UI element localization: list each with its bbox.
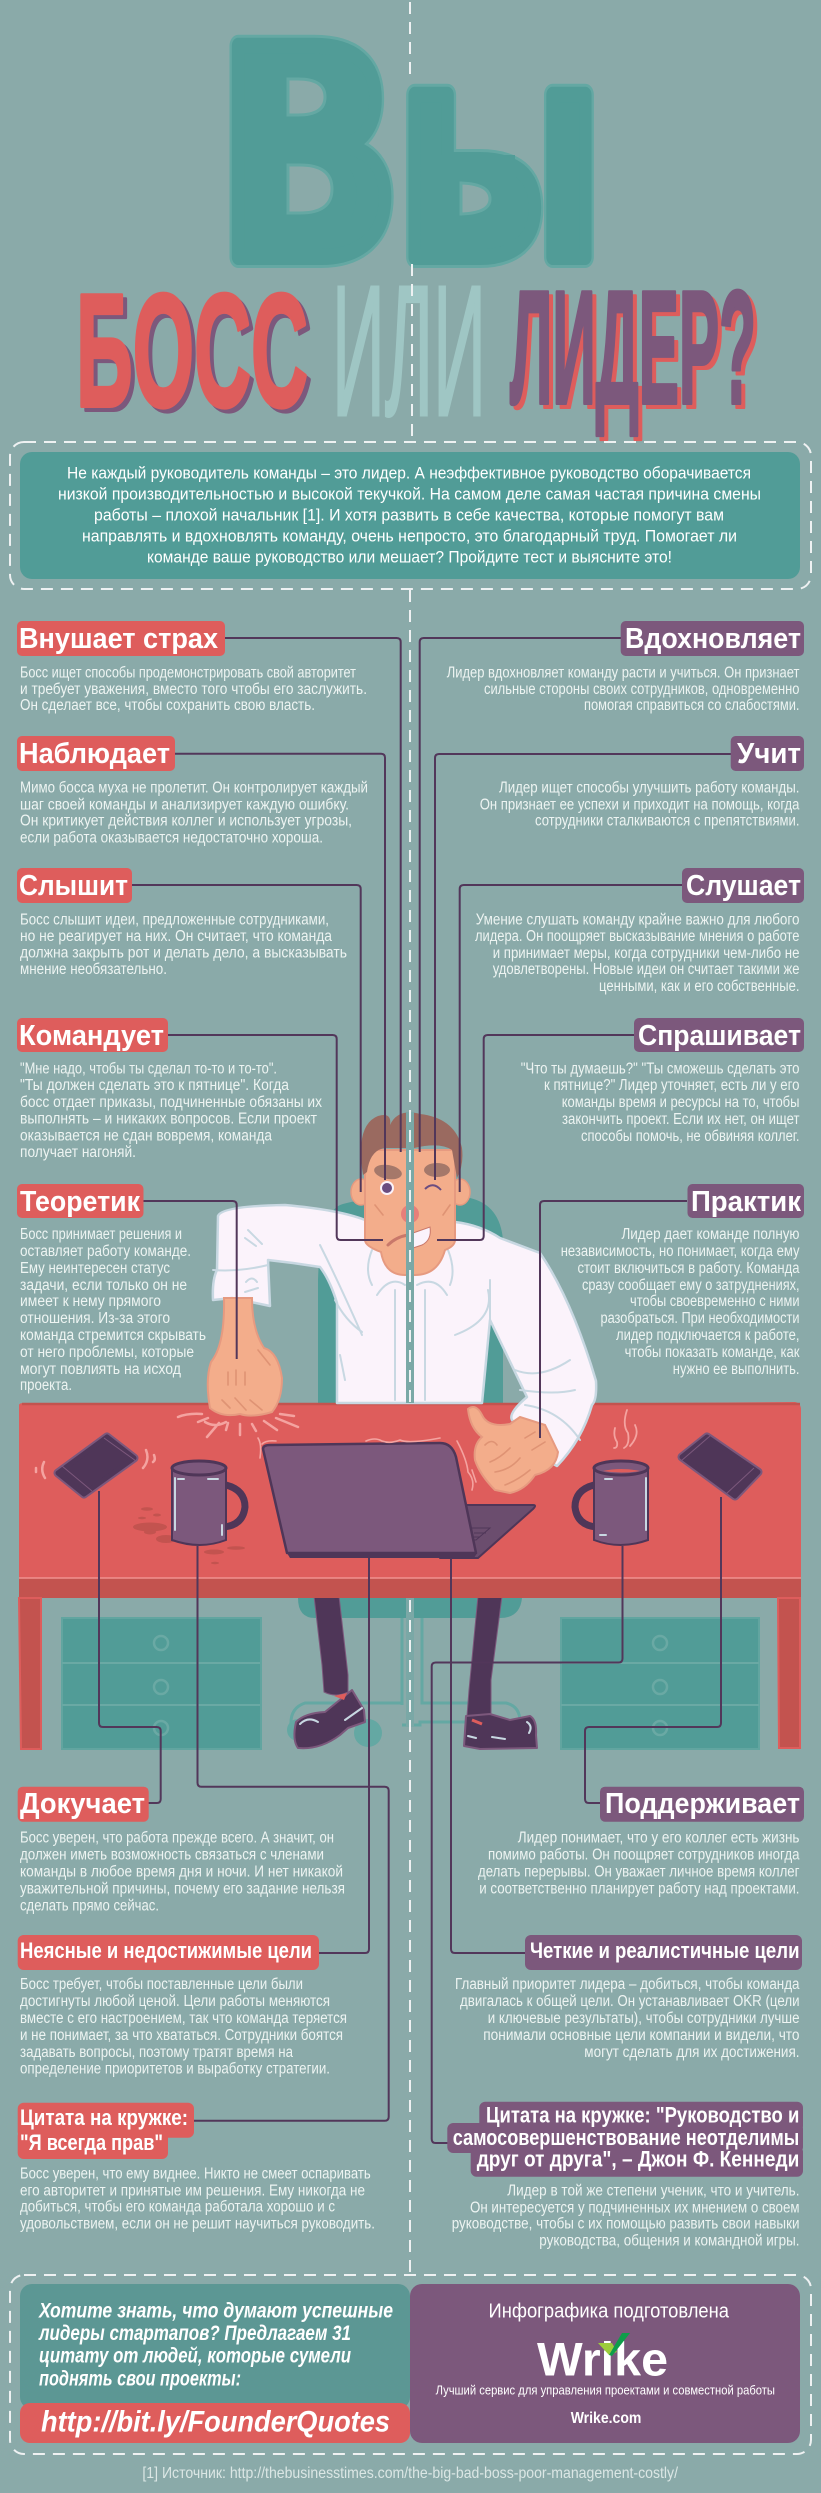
illustration: chair seat and base bbox=[287, 1598, 522, 1747]
boss: Внушает страх: Внушает страх bbox=[19, 623, 218, 655]
connector: Командует bbox=[168, 1035, 383, 1240]
boss: Неясные и недостижимые цели: задавать вопросы, поэтому тратят время на bbox=[20, 2044, 293, 2061]
boss: Командует: получает нагоняй. bbox=[20, 1144, 136, 1161]
boss: Слышит: но не реагирует на них. Он считает, что команда bbox=[20, 928, 332, 945]
boss: Наблюдает: Он критикует действия коллег и использует угрозы, bbox=[20, 813, 352, 830]
boss: Неясные и недостижимые цели: достигнуты любой ценой. Цели работы меняются bbox=[20, 1993, 330, 2010]
boss: Наблюдает: Наблюдает bbox=[19, 738, 170, 770]
connector: Неясные цели bbox=[319, 1558, 369, 1953]
illustration: right drawers bbox=[561, 1618, 759, 1749]
panel: quotes invitation: поднять свои проекты: bbox=[39, 2368, 241, 2391]
illustration: laptop bbox=[263, 1443, 535, 1558]
text: БОСС bbox=[76, 261, 308, 441]
text: ИЛИ bbox=[332, 248, 486, 455]
boss: Наблюдает: Мимо босса муха не пролетит. Он контролирует каждый bbox=[20, 779, 368, 796]
boss: Теоретик: Теоретик bbox=[20, 1186, 140, 1218]
boss: Неясные и недостижимые цели: Босс требует, чтобы поставленные цели были bbox=[20, 1976, 303, 1993]
panel: quotes invitation: лидеры стартапов? Предлагаем 31 bbox=[38, 2322, 351, 2345]
boss: Внушает страх: Босс ищет способы продемонстрировать свой авторитет bbox=[20, 664, 356, 682]
connector: Четкие цели bbox=[451, 1558, 525, 1953]
boss: Командует: "Мне надо, чтобы ты сделал то-то и то-то". bbox=[20, 1060, 277, 1078]
panel: Wrike credit: Лучший сервис для управления проектами и совместной работы bbox=[436, 2382, 775, 2397]
boss: Внушает страх: и требует уважения, вместо того чтобы его заслужить. bbox=[20, 681, 367, 698]
boss: Неясные и недостижимые цели: Неясные и недостижимые цели bbox=[20, 1938, 312, 1963]
boss: Командует: оказывается не сдан вовремя, команда bbox=[20, 1127, 272, 1144]
connector: Поддерживает bbox=[585, 1497, 721, 1803]
connector: Практик bbox=[540, 1201, 687, 1438]
boss: Цитата на кружке: Цитата на кружке: bbox=[20, 2105, 188, 2130]
boss: Теоретик: могут повлиять на исход bbox=[20, 1361, 181, 1378]
title: Вы bbox=[222, 0, 602, 323]
boss: Теоретик bbox=[17, 1184, 206, 1394]
boss: Докучает: должен иметь возможность связаться с членами bbox=[20, 1846, 324, 1863]
boss: Теоретик: задачи, если только он не bbox=[20, 1277, 187, 1294]
panel: introduction: работы – плохой начальник [1]. И хотя развить в себе качества, которые помогут вам bbox=[94, 506, 724, 524]
leader: Вдохновляет: Вдохновляет bbox=[625, 623, 801, 655]
boss: Теоретик: команда стремится скрывать bbox=[20, 1327, 206, 1344]
boss: Наблюдает: шаг своей команды и анализирует каждую ошибку. bbox=[20, 796, 349, 813]
leader: Спрашивает bbox=[521, 1018, 804, 1145]
text: БОСС bbox=[80, 265, 312, 445]
boss: Внушает страх: Он сделает все, чтобы сохранить свою власть. bbox=[20, 697, 315, 714]
illustration: chair back bbox=[318, 1198, 503, 1403]
leader: Слушает: Слушает bbox=[686, 870, 801, 902]
panel: quotes invitation: цитату от людей, которые сумели bbox=[39, 2345, 351, 2368]
boss: Командует: "Ты должен сделать это к пятнице". Когда bbox=[20, 1077, 289, 1094]
illustration: fist on the desk bbox=[208, 1298, 282, 1416]
panel: Wrike credit bbox=[410, 2284, 800, 2443]
boss: Слышит: мнение необязательно. bbox=[20, 961, 167, 978]
connector: Цитата босса bbox=[194, 1546, 389, 2121]
connector: Наблюдает bbox=[175, 754, 385, 1180]
boss: Теоретик: проекта. bbox=[20, 1377, 72, 1394]
leader: Четкие и реалистичные цели bbox=[455, 1935, 802, 2061]
boss: Неясные и недостижимые цели: определение приоритетов и выработку стратегии. bbox=[20, 2060, 330, 2078]
boss: Цитата на кружке: добиться, чтобы его команда работала хорошо и с bbox=[20, 2199, 335, 2216]
illustration: laptop vibration lines bbox=[258, 1438, 476, 1490]
boss: Теоретик: имеет к нему прямого bbox=[20, 1293, 161, 1310]
dashed center divider bbox=[410, 2, 412, 2276]
boss: Слышит: Слышит bbox=[19, 870, 128, 902]
leader: Учит: Учит bbox=[737, 738, 801, 770]
connector: Слушает bbox=[460, 885, 682, 1192]
leader: Вдохновляет bbox=[447, 621, 804, 714]
leader: Цитата на кружке bbox=[447, 2102, 803, 2249]
illustration: left drawers bbox=[62, 1618, 261, 1749]
illustration: left phone bbox=[36, 1437, 155, 1494]
illustration: desk bbox=[19, 1402, 801, 1749]
boss: Теоретик: Босс принимает решения и bbox=[20, 1226, 182, 1243]
panel: link: http://bit.ly/FounderQuotes bbox=[41, 2406, 390, 2439]
boss: Наблюдает bbox=[17, 736, 368, 846]
panel: introduction: Не каждый руководитель команды – это лидер. А неэффективное руководство оборачивается bbox=[67, 464, 751, 482]
leader: Спрашивает: Спрашивает bbox=[638, 1020, 801, 1052]
leader: Практик bbox=[561, 1184, 804, 1378]
boss: Слышит bbox=[17, 868, 347, 978]
boss: Теоретик: Ему неинтересен статус bbox=[20, 1260, 170, 1277]
boss: Докучает: уважительной причины, почему его задание нельзя bbox=[20, 1880, 345, 1897]
connector: Теоретик bbox=[143, 1201, 237, 1359]
connector: Слышит bbox=[132, 885, 361, 1192]
logo: Wrike: Wrike bbox=[537, 2333, 668, 2386]
boss: Неясные и недостижимые цели: и не понимает, за что хвататься. Сотрудники боятся bbox=[20, 2027, 343, 2044]
panel: introduction bbox=[10, 442, 811, 589]
connector: Внушает страх bbox=[225, 638, 401, 1152]
leader: Слушает bbox=[475, 868, 804, 995]
boss: Теоретик: оставляет работу команде. bbox=[20, 1243, 191, 1260]
leader: Практик: Практик bbox=[691, 1186, 801, 1218]
illustration: legs and shoes bbox=[294, 1596, 537, 1749]
boss: Слышит: должна закрыть рот и делать дело, а высказывать bbox=[20, 944, 347, 962]
panel: introduction: низкой производительностью и высокой текучкой. На самом деле самая частая причина смены bbox=[58, 486, 761, 504]
illustration: shirt torso and arms bbox=[213, 1205, 596, 1466]
boss: Внушает страх bbox=[17, 621, 367, 714]
connector: Спрашивает bbox=[437, 1035, 634, 1240]
illustration: left mug bbox=[172, 1461, 245, 1545]
boss: Цитата на кружке: его авторитет и принятые им решения. Ему никогда не bbox=[20, 2182, 365, 2199]
boss: Докучает bbox=[18, 1787, 345, 1914]
boss: Командует: выполнять – и никаких вопросов. Если проект bbox=[20, 1111, 317, 1128]
panel: footer frame bbox=[10, 2275, 811, 2454]
boss: Командует bbox=[17, 1018, 322, 1161]
title: БОСС bbox=[76, 261, 312, 445]
boss: Теоретик: отношения. Из-за этого bbox=[20, 1310, 170, 1327]
connector: Учит bbox=[435, 754, 731, 1180]
leader: Поддерживает: Поддерживает bbox=[605, 1788, 800, 1820]
boss: Докучает: Докучает bbox=[20, 1788, 145, 1820]
panel: Wrike credit: Инфографика подготовлена bbox=[488, 2300, 730, 2322]
leader: Поддерживает bbox=[478, 1787, 804, 1897]
boss: Докучает: Босс уверен, что работа прежде всего. А значит, он bbox=[20, 1829, 334, 1846]
illustration: thumbs-up hand bbox=[468, 1407, 558, 1493]
panel: introduction: направлять и вдохновлять команду, очень непросто, это благодарный труд. Помогает ли bbox=[82, 528, 737, 546]
illustration: boss and leader face bbox=[351, 1112, 470, 1275]
connector: Вдохновляет bbox=[420, 638, 621, 1152]
boss: Цитата на кружке bbox=[18, 2103, 375, 2232]
illustration: coffee spills bbox=[133, 1507, 245, 1564]
illustration: right mug with steam bbox=[575, 1410, 648, 1545]
boss: Командует: босс отдает приказы, подчиненные обязаны их bbox=[20, 1094, 322, 1111]
leader: Практик: нужно ее выполнить. bbox=[673, 1361, 800, 1378]
boss: Неясные и недостижимые цели bbox=[18, 1935, 347, 2078]
connector: Цитата лидера bbox=[432, 1546, 622, 2143]
panel: introduction: команде ваше руководство или мешает? Пройдите тест и выясните это! bbox=[147, 548, 672, 566]
boss: Неясные и недостижимые цели: вместе с его настроением, так что команда теряется bbox=[20, 2010, 347, 2027]
illustration: right phone bbox=[681, 1436, 758, 1496]
boss: Докучает: команды в любое время дня и ночи. И нет никакой bbox=[20, 1863, 343, 1880]
boss: Цитата на кружке: удовольствием, если он не решит научиться руководить. bbox=[20, 2215, 375, 2232]
panel: Wrike credit: Wrike.com bbox=[571, 2410, 641, 2427]
boss: Теоретик: от него проблемы, которые bbox=[20, 1344, 194, 1361]
connector: Докучает bbox=[99, 1491, 161, 1803]
boss: Наблюдает: если работа оказывается недостаточно хороша. bbox=[20, 829, 323, 846]
illustration: fist impact lines bbox=[178, 1414, 298, 1437]
leader: Практик: Лидер дает команде полную bbox=[622, 1226, 800, 1243]
boss: Командует: Командует bbox=[19, 1020, 164, 1052]
panel: quotes invitation bbox=[20, 2284, 410, 2409]
boss: Слышит: Босс слышит идеи, предложенные сотрудниками, bbox=[20, 912, 329, 928]
leader: Учит bbox=[480, 736, 804, 830]
panel: quotes invitation: Хотите знать, что думают успешные bbox=[38, 2299, 393, 2322]
boss: Цитата на кружке: "Я всегда прав" bbox=[20, 2130, 163, 2155]
center divider strip over the figure bbox=[406, 1112, 414, 1727]
boss: Докучает: сделать прямо сейчас. bbox=[20, 1897, 159, 1914]
source footnote: [1] Источник: http://thebusinesstimes.com/the-big-bad-boss-poor-management-costly/ bbox=[142, 2465, 678, 2482]
boss: Цитата на кружке: Босс уверен, что ему виднее. Никто не смеет оспаривать bbox=[20, 2165, 371, 2182]
